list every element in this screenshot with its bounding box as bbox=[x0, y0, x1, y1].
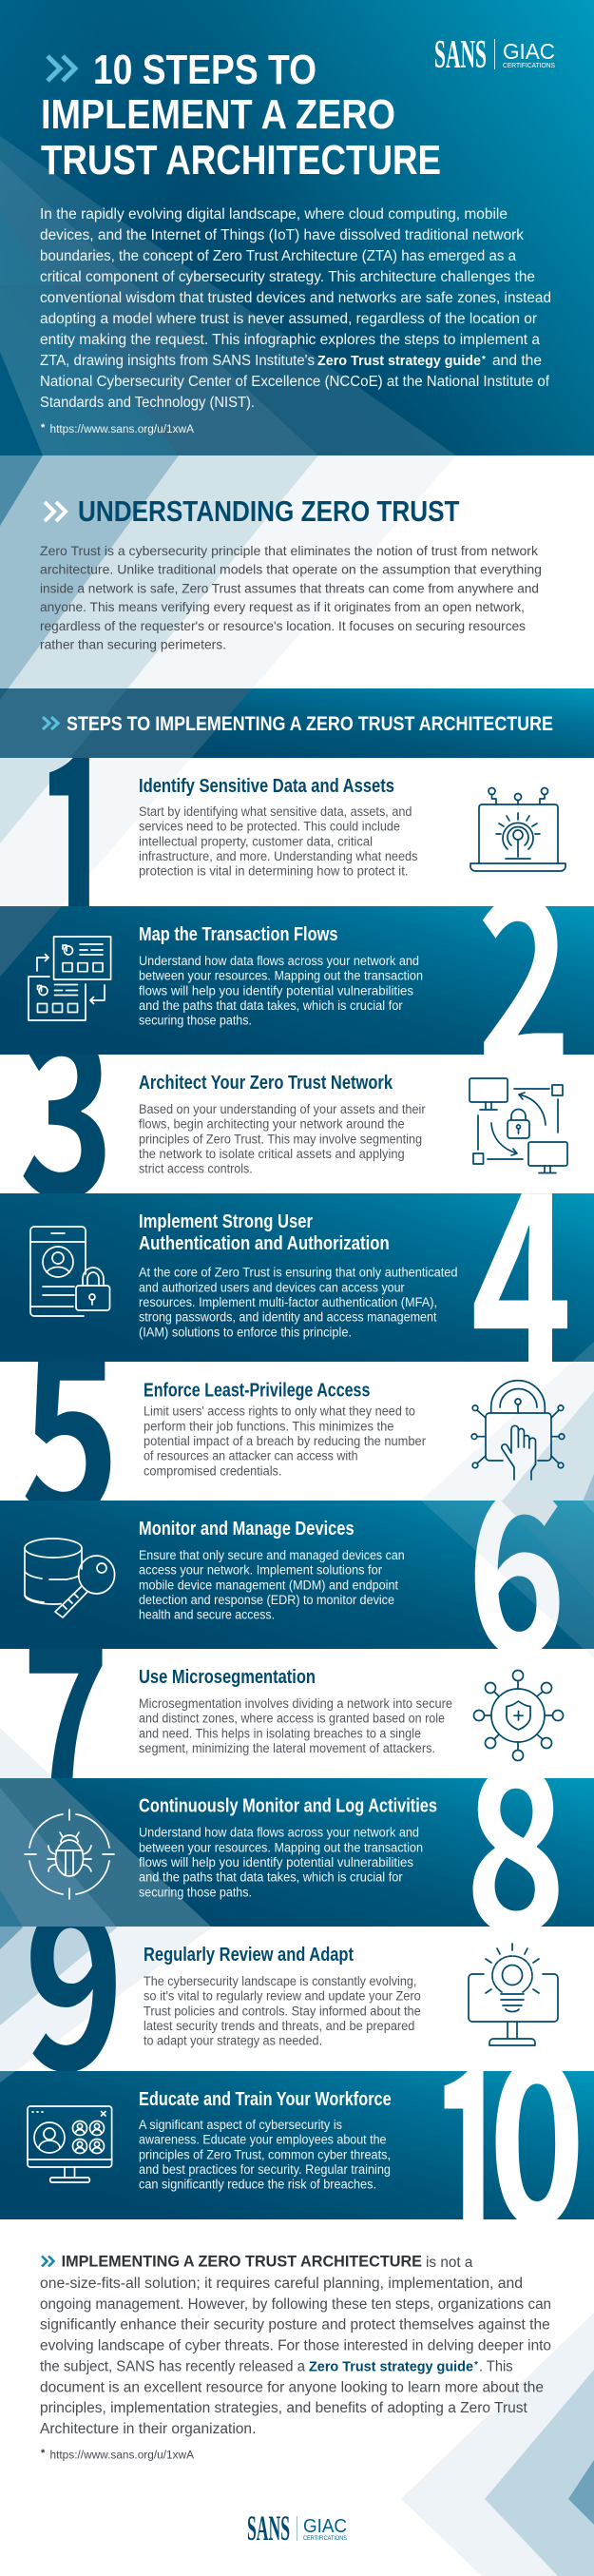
text block: conclusion: IMPLEMENTING A ZERO TRUST ARCHITECTURE bbox=[62, 2252, 422, 2271]
text: step 1 bbox=[139, 804, 418, 879]
text: step 3: strict access controls. bbox=[139, 1162, 253, 1176]
text block: definition bbox=[40, 543, 542, 652]
text block: introduction: National Cybersecurity Center of Excellence (NCCoE) at the National Institute of bbox=[40, 374, 550, 390]
text block: introduction: devices, and the Internet of Things (IoT) have dissolved traditional network bbox=[40, 227, 524, 243]
text block: introduction: entity making the request. This infographic explores the steps to implement a bbox=[40, 332, 540, 348]
heading: step 4: Authentication and Authorization bbox=[139, 1232, 390, 1254]
title: 10 STEPS TO bbox=[93, 47, 316, 93]
text block: conclusion bbox=[40, 2252, 551, 2437]
text: step 2: Understand how data flows across your network and bbox=[139, 954, 419, 968]
text block: conclusion: * bbox=[474, 2360, 478, 2371]
text: step 8: securing those paths. bbox=[139, 1885, 252, 1899]
panel: step 2 bbox=[0, 906, 594, 1055]
text: step 1: Start by identifying what sensitive data, assets, and bbox=[139, 804, 412, 819]
icon: monitor with video call bbox=[28, 2106, 112, 2182]
text: step 5: Limit users' access rights to only what they need to bbox=[144, 1404, 415, 1419]
text block: conclusion: one-size-fits-all solution; it requires careful planning, implementation, and bbox=[40, 2276, 523, 2292]
panel: header bbox=[0, 0, 594, 455]
text: step 8: and the paths that data takes, which is crucial for bbox=[139, 1870, 403, 1885]
text block: introduction: adopting a model where trust is never assumed, regardless of the location or bbox=[40, 311, 537, 327]
heading: step 6: Monitor and Manage Devices bbox=[139, 1518, 354, 1540]
number 10 bbox=[445, 2071, 578, 2219]
icon: monitor with gear bulb bbox=[469, 1944, 558, 2045]
text: step 9: so it's vital to regularly review and update your Zero bbox=[144, 1989, 421, 2004]
text: step 5 bbox=[144, 1404, 427, 1478]
heading: step 8: Continuously Monitor and Log Activities bbox=[139, 1795, 437, 1817]
text: step 3 bbox=[139, 1102, 426, 1176]
text: step 9: latest security trends and threats, and be prepared bbox=[144, 2019, 414, 2033]
text: step 6: health and secure access. bbox=[139, 1608, 275, 1622]
text: step 6: access your network. Implement solutions for bbox=[139, 1563, 383, 1578]
text block: conclusion: principles, implementation strategies, and benefits of adopting a Zero Trust bbox=[40, 2400, 528, 2416]
text block: conclusion: the subject, SANS has recently released a bbox=[40, 2358, 305, 2374]
text block: conclusion: is not a bbox=[426, 2255, 473, 2271]
text: step 7: segment, minimizing the lateral movement of attackers. bbox=[139, 1741, 435, 1755]
heading: step 1: Identify Sensitive Data and Assets bbox=[139, 775, 394, 797]
text: step 6: detection and response (EDR) to monitor device bbox=[139, 1593, 394, 1607]
text: step 4: At the core of Zero Trust is ensuring that only authenticated bbox=[139, 1266, 458, 1280]
text block: introduction: Zero Trust strategy guide bbox=[317, 353, 481, 369]
text: step 10: can significantly reduce the risk of breaches. bbox=[139, 2178, 376, 2192]
text: step 4: strong passwords, and identity and access management bbox=[139, 1310, 437, 1325]
heading: step 3: Architect Your Zero Trust Network bbox=[139, 1072, 393, 1094]
text: step 2 bbox=[139, 954, 423, 1028]
icon: lock with hand bbox=[471, 1381, 565, 1480]
icon: phone with user and lock bbox=[30, 1227, 110, 1316]
icon: title chevrons bbox=[48, 56, 75, 81]
text block: definition: anyone. This means verifying every request as if it originates from an open network, bbox=[40, 599, 525, 614]
text: step 4: and authorized users and devices can access your bbox=[139, 1280, 405, 1294]
text block: introduction: boundaries, the concept of Zero Trust Architecture (ZTA) has emerged as a bbox=[40, 248, 516, 264]
text: step 2: flows will help you identify potential vulnerabilities bbox=[139, 983, 413, 997]
text: step 7: Microsegmentation involves dividing a network into secure bbox=[139, 1696, 452, 1711]
text: step 3: the network to isolate critical assets and applying bbox=[139, 1147, 405, 1161]
logo: SANS GIAC footer: GIAC bbox=[303, 2516, 347, 2537]
logo: SANS GIAC footer: CERTIFICATIONS bbox=[303, 2535, 348, 2542]
text: step 1: infrastructure, and more. Understanding what needs bbox=[139, 849, 418, 863]
icon: bug in target bbox=[25, 1810, 114, 1899]
text: step 6: Ensure that only secure and managed devices can bbox=[139, 1548, 405, 1562]
heading: step 5: Enforce Least-Privilege Access bbox=[144, 1379, 370, 1401]
text block: introduction: In the rapidly evolving digital landscape, where cloud computing, mobile bbox=[40, 206, 508, 223]
text block: conclusion: Zero Trust strategy guide bbox=[309, 2358, 473, 2374]
icon: transaction flow panels bbox=[29, 937, 111, 1020]
text block: conclusion: ongoing management. However, by following these ten steps, organizations can bbox=[40, 2296, 551, 2313]
text: step 10 bbox=[139, 2118, 391, 2192]
panel: step 9 bbox=[0, 1927, 559, 2071]
text: step 2: and the paths that data takes, which is crucial for bbox=[139, 998, 403, 1013]
text: step 4: resources. Implement multi-factor authentication (MFA), bbox=[139, 1295, 437, 1309]
icon: network with lock bbox=[469, 1078, 567, 1173]
text block: introduction: Standards and Technology (NIST). bbox=[40, 395, 255, 411]
text: step 5: compromised credentials. bbox=[144, 1463, 281, 1478]
number 3: 3 bbox=[19, 934, 114, 1262]
logo: SANS GIAC footer: SANS bbox=[247, 2509, 290, 2548]
number 1: 1 bbox=[34, 649, 118, 1009]
text: step 8: flows will help you identify potential vulnerabilities bbox=[139, 1855, 413, 1869]
panel: step 8 bbox=[0, 1778, 594, 1927]
text: step 10: principles of Zero Trust, common cyber threats, bbox=[139, 2147, 391, 2161]
text block: definition: Zero Trust is a cybersecurity principle that eliminates the notion of trust from network bbox=[40, 543, 539, 558]
text: step 5: potential impact of a breach by reducing the number bbox=[144, 1434, 427, 1448]
logo: SANS GIAC: SANS bbox=[434, 33, 487, 77]
heading: step 4 bbox=[139, 1211, 390, 1254]
text: step 5: of resources an attacker can access with bbox=[144, 1449, 358, 1463]
icon: database with key bbox=[25, 1539, 115, 1617]
text: step 9: Trust policies and controls. Stay informed about the bbox=[144, 2004, 421, 2018]
heading: step 9: Regularly Review and Adapt bbox=[144, 1944, 354, 1966]
text block: definition: inside a network is safe, Zero Trust assumes that threats can come from anywhere and bbox=[40, 580, 539, 595]
logo: SANS GIAC: CERTIFICATIONS bbox=[503, 61, 555, 69]
text block: definition: regardless of the requester's or resource's location. It focuses on securing resources bbox=[40, 618, 526, 633]
text: step 7: and distinct zones, where access is granted based on role bbox=[139, 1712, 445, 1726]
text: step 6 bbox=[139, 1548, 405, 1622]
title: IMPLEMENT A ZERO bbox=[41, 91, 395, 138]
footnote: https://www.sans.org/u/1xwA bbox=[49, 424, 194, 436]
text: step 6: mobile device management (MDM) and endpoint bbox=[139, 1578, 398, 1592]
text block: definition: rather than securing perimeters. bbox=[40, 637, 226, 652]
heading: step 10: Educate and Train Your Workforce bbox=[139, 2088, 392, 2110]
text: step 8: between your resources. Mapping out the transaction bbox=[139, 1840, 423, 1854]
text: step 7: and need. This helps in isolating breaches to a single bbox=[139, 1726, 421, 1740]
panel: step 10 bbox=[0, 2071, 594, 2219]
panel: step 5 bbox=[25, 1362, 594, 1501]
text block: conclusion: significantly enhance their security posture and protect themselves against the bbox=[40, 2317, 550, 2334]
heading: step 7: Use Microsegmentation bbox=[139, 1666, 316, 1688]
panel: step 7 bbox=[0, 1649, 594, 1778]
heading: UNDERSTANDING ZERO TRUST bbox=[78, 494, 460, 528]
text block: introduction: critical component of cybersecurity strategy. This architecture challenges the bbox=[40, 269, 535, 285]
icon: band chevrons bbox=[43, 717, 58, 729]
footnote: https://www.sans.org/u/1xwA bbox=[49, 2450, 194, 2462]
heading: step 4: Implement Strong User bbox=[139, 1211, 313, 1232]
heading: step 2: Map the Transaction Flows bbox=[139, 923, 338, 945]
panel: step 1 bbox=[0, 758, 566, 906]
logo: SANS GIAC: GIAC bbox=[503, 39, 555, 64]
text: step 8 bbox=[139, 1826, 423, 1899]
text: step 4: (IAM) solutions to enforce this principle. bbox=[139, 1325, 352, 1339]
text block: introduction: conventional wisdom that trusted devices and networks are safe zones, instead bbox=[40, 290, 551, 306]
text block: conclusion: evolving landscape of cyber threats. For those interested in delving deeper into bbox=[40, 2338, 551, 2354]
title bbox=[41, 47, 441, 184]
icon: shield in network bbox=[473, 1670, 563, 1761]
text: step 4 bbox=[139, 1266, 458, 1339]
icon: conclusion chevrons bbox=[42, 2256, 53, 2267]
footnote: * bbox=[41, 2448, 46, 2459]
panel: conclusion bbox=[0, 2219, 594, 2576]
icon: section chevrons bbox=[45, 502, 66, 521]
text: step 5: perform their job functions. This minimizes the bbox=[144, 1419, 393, 1433]
panel: step 4 bbox=[0, 1193, 594, 1362]
text: step 10: and best practices for security. Regular training bbox=[139, 2162, 391, 2177]
text: step 7 bbox=[139, 1696, 452, 1755]
panel: step 6 bbox=[0, 1501, 594, 1649]
panel: understanding zero trust bbox=[0, 455, 541, 688]
number 9: 9 bbox=[24, 1807, 125, 2135]
number 10: 1 bbox=[430, 1962, 511, 2322]
panel: steps heading band bbox=[0, 688, 594, 758]
text: step 8: Understand how data flows across your network and bbox=[139, 1826, 419, 1840]
text: step 10: A significant aspect of cybersecurity is bbox=[139, 2118, 342, 2132]
text block: introduction bbox=[40, 206, 551, 411]
text block: conclusion: document is an excellent resource for anyone looking to learn more about the bbox=[40, 2379, 544, 2395]
text: step 9: to adapt your strategy as needed. bbox=[144, 2034, 322, 2048]
text: step 2: between your resources. Mapping out the transaction bbox=[139, 969, 423, 983]
text block: introduction: ZTA, drawing insights from SANS Institute's bbox=[40, 353, 315, 369]
text block: conclusion: . This bbox=[479, 2358, 513, 2374]
text block: introduction: * bbox=[482, 355, 486, 365]
text: step 10: awareness. Educate your employees about the bbox=[139, 2133, 386, 2147]
text block: introduction: and the bbox=[492, 353, 542, 369]
text: step 9 bbox=[144, 1974, 421, 2048]
text: step 9: The cybersecurity landscape is constantly evolving, bbox=[144, 1974, 416, 1988]
number 5: 5 bbox=[21, 1253, 120, 1581]
icon: laptop with fingerprint bbox=[470, 787, 565, 871]
text block: conclusion: Architecture in their organization. bbox=[40, 2421, 256, 2437]
title: TRUST ARCHITECTURE bbox=[41, 137, 441, 184]
number 7: 7 bbox=[22, 1546, 109, 1874]
text: step 1: intellectual property, customer data, critical bbox=[139, 834, 373, 848]
text: step 3: flows, begin architecting your network around the bbox=[139, 1117, 405, 1132]
text: step 1: protection is vital in determining how to protect it. bbox=[139, 864, 409, 879]
text: step 1: services need to be protected. This could include bbox=[139, 820, 400, 834]
footnote: * bbox=[41, 422, 46, 434]
text: step 3: principles of Zero Trust. This may involve segmenting bbox=[139, 1132, 422, 1146]
panel: step 3 bbox=[23, 1055, 568, 1193]
text: step 2: securing those paths. bbox=[139, 1014, 252, 1028]
text: step 3: Based on your understanding of your assets and their bbox=[139, 1102, 426, 1116]
text block: definition: architecture. Unlike traditional models that operate on the assumption that everything bbox=[40, 562, 542, 577]
